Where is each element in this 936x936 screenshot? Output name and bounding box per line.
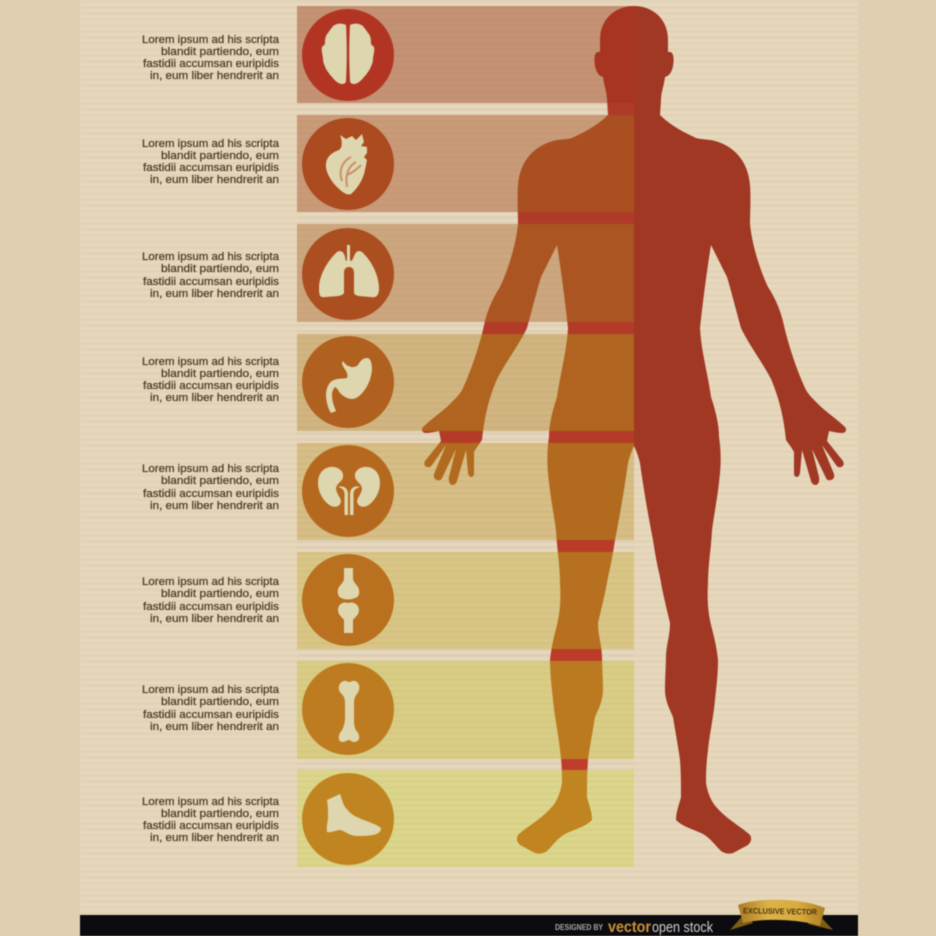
text block 7: Lorem ipsum ad his scripta bbox=[142, 684, 280, 696]
text block 3 bbox=[142, 251, 280, 300]
icon: brain bbox=[322, 24, 374, 84]
text block 2 bbox=[142, 138, 280, 186]
text block 1: Lorem ipsum ad his scripta bbox=[142, 34, 280, 46]
text block 6: blandit partiendo, eum bbox=[161, 588, 279, 600]
row 4: stomach bbox=[302, 336, 394, 428]
text block 5 bbox=[142, 463, 280, 512]
text block 3: blandit partiendo, eum bbox=[161, 263, 279, 275]
text block 6 bbox=[142, 576, 280, 625]
text block 8: Lorem ipsum ad his scripta bbox=[142, 796, 280, 808]
icon circle: brain bbox=[302, 9, 394, 101]
icon circle: knee bbox=[302, 554, 394, 646]
row 6: knee joint bbox=[302, 554, 394, 646]
text block 3: fastidii accumsan euripidis bbox=[143, 276, 280, 288]
icon circle: stomach bbox=[302, 336, 394, 428]
icon circle: lungs bbox=[302, 228, 394, 320]
text block 1: fastidii accumsan euripidis bbox=[143, 58, 280, 70]
icon: bone bbox=[339, 681, 359, 742]
icon circle: foot bbox=[302, 773, 394, 865]
text block 1 bbox=[142, 34, 280, 82]
badge: exclusive vector ribbon bbox=[730, 900, 833, 930]
text block 2: Lorem ipsum ad his scripta bbox=[142, 138, 280, 150]
text block 4: fastidii accumsan euripidis bbox=[143, 380, 280, 392]
text block 5: blandit partiendo, eum bbox=[161, 475, 279, 487]
text block 4: blandit partiendo, eum bbox=[161, 368, 279, 380]
icon circle: heart bbox=[302, 118, 394, 210]
footer credit bbox=[555, 919, 713, 936]
text block 7: in, eum liber hendrerit an bbox=[150, 721, 279, 733]
badge: exclusive vector ribbon: EXCLUSIVE VECTOR bbox=[743, 906, 817, 917]
text block 8 bbox=[142, 796, 280, 844]
text block 6: Lorem ipsum ad his scripta bbox=[142, 576, 280, 588]
row 2: heart bbox=[302, 118, 394, 210]
body left half colour bands bbox=[410, 0, 634, 867]
text block 6: in, eum liber hendrerit an bbox=[150, 613, 279, 625]
icon: lungs bbox=[319, 245, 379, 297]
text block 2: blandit partiendo, eum bbox=[161, 150, 279, 162]
text block 2: in, eum liber hendrerit an bbox=[150, 174, 279, 186]
body right half silhouette bbox=[634, 6, 846, 854]
row 7: bone bbox=[302, 663, 394, 755]
text block 4: Lorem ipsum ad his scripta bbox=[142, 356, 280, 368]
row 8: foot bbox=[302, 773, 394, 865]
text block 8: blandit partiendo, eum bbox=[161, 808, 279, 820]
text block 3: in, eum liber hendrerit an bbox=[150, 288, 279, 300]
text block 2: fastidii accumsan euripidis bbox=[143, 162, 280, 174]
text block 7: fastidii accumsan euripidis bbox=[143, 709, 280, 721]
icon: stomach bbox=[326, 358, 372, 413]
row 5: kidneys bbox=[302, 445, 394, 537]
icon: knee joint bbox=[338, 568, 359, 633]
text block 6: fastidii accumsan euripidis bbox=[143, 601, 280, 613]
icon: heart bbox=[326, 134, 367, 194]
row 3: lungs bbox=[302, 228, 394, 320]
text block 4 bbox=[142, 356, 280, 404]
icon: foot bbox=[327, 794, 381, 836]
text block 8: fastidii accumsan euripidis bbox=[143, 820, 280, 832]
text block 7 bbox=[142, 684, 280, 733]
row 1: brain bbox=[302, 9, 394, 101]
text block 8: in, eum liber hendrerit an bbox=[150, 832, 279, 844]
footer credit: DESIGNED BY bbox=[555, 923, 604, 932]
text block 5: fastidii accumsan euripidis bbox=[143, 488, 280, 500]
footer bar bbox=[80, 915, 858, 936]
text block 7: blandit partiendo, eum bbox=[161, 696, 279, 708]
icon circle: kidneys bbox=[302, 445, 394, 537]
text block 3: Lorem ipsum ad his scripta bbox=[142, 251, 280, 263]
text block 4: in, eum liber hendrerit an bbox=[150, 392, 279, 404]
text block 5: in, eum liber hendrerit an bbox=[150, 500, 279, 512]
text block 5: Lorem ipsum ad his scripta bbox=[142, 463, 280, 475]
icon circle: bone bbox=[302, 663, 394, 755]
text block 1: in, eum liber hendrerit an bbox=[150, 70, 279, 82]
footer credit: open stock bbox=[652, 919, 713, 936]
footer credit: vector bbox=[608, 919, 651, 936]
panel: organ rows bbox=[297, 6, 634, 867]
icon: kidneys bbox=[318, 467, 380, 515]
text block 1: blandit partiendo, eum bbox=[161, 46, 279, 58]
heart vessels bbox=[341, 157, 361, 187]
